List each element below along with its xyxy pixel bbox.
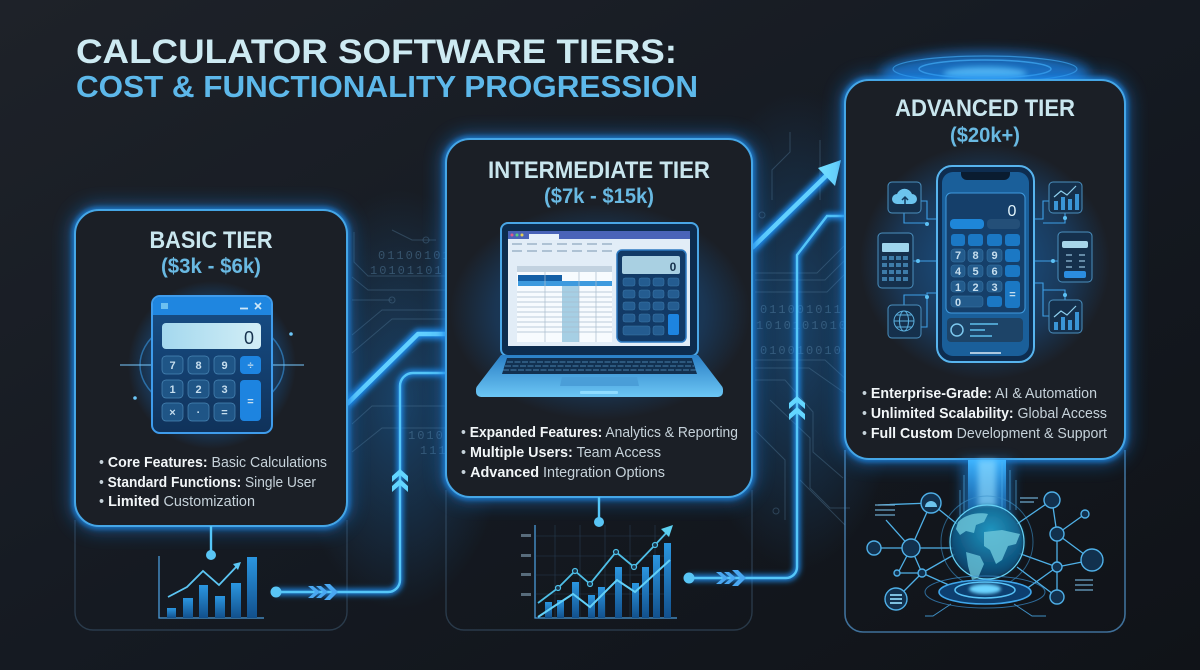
arrow: intermediate to advanced rising arrow <box>752 160 841 248</box>
icon: desktop calculator: = <box>247 396 254 408</box>
icon: smartphone calculator with satellite modules: 3 <box>991 282 998 294</box>
icon: smartphone calculator with satellite modules: = <box>1009 289 1016 301</box>
panel: advanced tier <box>845 80 1125 459</box>
feature list: basic tier <box>99 454 327 510</box>
feature list: intermediate tier: • Multiple Users: Team Access <box>461 444 661 461</box>
feature list: basic tier: • Limited Customization <box>99 493 255 510</box>
illustration: global network <box>867 460 1103 616</box>
panel: basic tier <box>75 210 347 526</box>
icon: smartphone calculator with satellite modules: 5 <box>972 266 979 278</box>
icon: smartphone calculator with satellite modules: 9 <box>991 250 998 262</box>
icon: desktop calculator: 1 <box>169 384 176 396</box>
feature list: intermediate tier: • Expanded Features: Analytics & Reporting <box>461 424 738 441</box>
heading: basic tier: BASIC TIER <box>150 227 272 254</box>
feature list: advanced tier: • Enterprise-Grade: AI & Automation <box>862 385 1097 402</box>
heading: intermediate tier: INTERMEDIATE TIER <box>488 157 710 184</box>
halo above advanced tier <box>880 52 1090 96</box>
price: basic tier: ($3k - $6k) <box>161 255 261 278</box>
icon: smartphone calculator with satellite modules: 0 <box>1008 203 1017 220</box>
binary text left: 01100101 <box>378 249 452 263</box>
icon: desktop calculator <box>120 281 304 449</box>
icon: desktop calculator: 7 <box>169 360 176 372</box>
title: CALCULATOR SOFTWARE TIERS: <box>76 33 677 71</box>
title <box>76 33 698 104</box>
feature list: basic tier: • Core Features: Basic Calculations <box>99 454 327 471</box>
icon: desktop calculator: 0 <box>244 328 254 348</box>
icon: desktop calculator: 2 <box>195 384 202 396</box>
lower frames <box>75 490 752 630</box>
icon: desktop calculator: 3 <box>221 384 228 396</box>
background: 10101010100 <box>756 319 857 333</box>
icon: smartphone calculator with satellite modules: 1 <box>955 282 961 294</box>
icon: desktop calculator: 8 <box>195 360 202 372</box>
icon: laptop with spreadsheet and calculator: 0 <box>670 260 677 274</box>
feature list: intermediate tier <box>461 424 738 481</box>
title: COST & FUNCTIONALITY PROGRESSION <box>76 69 698 104</box>
icon: smartphone calculator with satellite modules: 7 <box>955 250 961 262</box>
arrow: intermediate chart to advanced connector <box>684 216 846 586</box>
icon: smartphone calculator with satellite modules: 8 <box>972 250 979 262</box>
price: intermediate tier: ($7k - $15k) <box>544 185 654 208</box>
price: advanced tier: ($20k+) <box>950 124 1020 147</box>
arrow: basic chart to intermediate lower connector <box>270 373 447 600</box>
advanced lower frame <box>845 450 1125 632</box>
heading: advanced tier: ADVANCED TIER <box>895 95 1075 122</box>
icon: desktop calculator: · <box>197 407 200 419</box>
icon: desktop calculator: ÷ <box>247 360 254 372</box>
feature list: advanced tier: • Full Custom Development & Support <box>862 425 1108 442</box>
arrow: basic to intermediate upper connector <box>347 334 447 404</box>
background: 10100 <box>408 429 454 443</box>
icon: laptop with spreadsheet and calculator <box>450 204 750 420</box>
chart: basic growth <box>159 526 264 618</box>
feature list: advanced tier: • Unlimited Scalability: Global Access <box>862 405 1107 422</box>
icon: smartphone calculator with satellite modules: 4 <box>955 266 962 278</box>
background: 1110 <box>420 444 457 458</box>
icon: smartphone calculator with satellite modules <box>860 144 1110 380</box>
icon: desktop calculator: 9 <box>221 360 228 372</box>
icon: smartphone calculator with satellite modules: 6 <box>991 266 998 278</box>
binary text right: 01100101110 <box>760 303 861 317</box>
icon: desktop calculator: × <box>169 407 176 419</box>
icon: smartphone calculator with satellite modules: 0 <box>955 297 961 309</box>
feature list: basic tier: • Standard Functions: Single User <box>99 474 316 491</box>
background: 0100100100 <box>760 344 852 358</box>
chart: intermediate growth <box>521 497 677 618</box>
panel: intermediate tier <box>446 139 752 497</box>
background: 10101101 <box>370 264 444 278</box>
feature list: advanced tier <box>862 385 1108 442</box>
feature list: intermediate tier: • Advanced Integration Options <box>461 464 665 481</box>
icon: smartphone calculator with satellite modules: 2 <box>972 282 979 294</box>
icon: desktop calculator: = <box>221 407 228 419</box>
